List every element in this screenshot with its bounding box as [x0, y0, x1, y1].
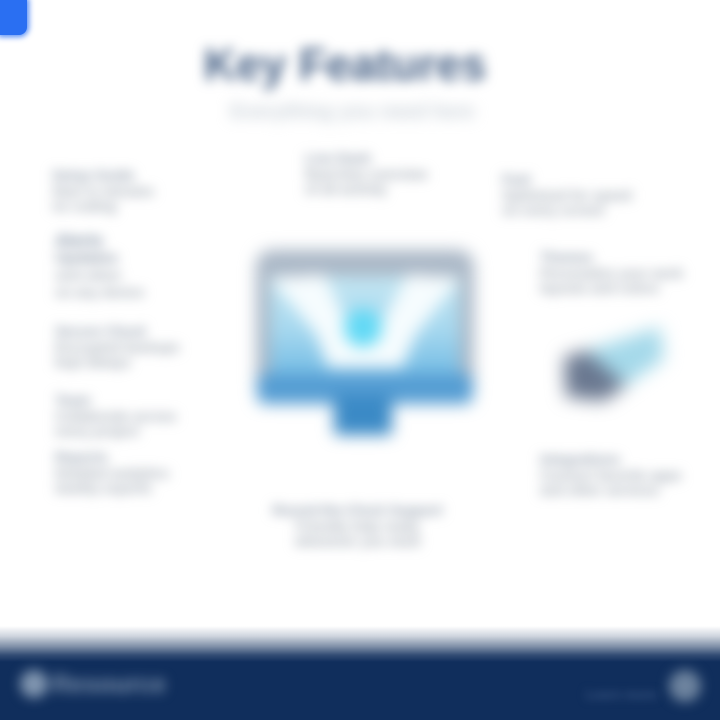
- feature: bottom center: whenever you need: [295, 534, 420, 549]
- feature: right 3: Integrations: [540, 451, 620, 467]
- feature: left 2: Alerts: [55, 231, 103, 250]
- footer icon: [669, 670, 701, 702]
- feature: bottom center: Round-the-Clock Support: [272, 502, 443, 518]
- feature: bottom center: Friendly help ready: [296, 519, 419, 534]
- monitor frame: [256, 250, 474, 400]
- feature: right 2: Themes: [540, 249, 593, 265]
- feature: right 2: [536, 246, 686, 300]
- monitor bottom bar: [257, 374, 473, 404]
- feature: left 1: Start in minutes: [52, 184, 154, 199]
- feature: left 4: Collaborate across: [55, 409, 177, 424]
- feature: left 4: [52, 390, 178, 443]
- feature: left 2: sent when: [55, 268, 121, 283]
- feature: left 5: weekly exports: [55, 481, 152, 496]
- feature: left 4: Team: [55, 392, 91, 408]
- feature: left 5: [50, 446, 171, 500]
- monitor stand: [334, 395, 392, 435]
- footer band: [0, 620, 720, 720]
- feature: left 3: Encrypted backups: [55, 340, 180, 355]
- feature: left 2: [50, 228, 146, 304]
- footer logo: [13, 663, 170, 705]
- feature: left 4: every project: [55, 424, 139, 439]
- footer logo: Resource: [52, 670, 166, 698]
- monitor screen: [270, 276, 460, 384]
- footer caption: Learn more: [586, 687, 657, 702]
- feature: left 1: Setup Guide: [52, 167, 134, 183]
- feature: right 1: Optimized for speed: [502, 188, 632, 203]
- feature: left 1: no coding: [52, 199, 116, 214]
- feature: right 2: Personalize your work: [540, 266, 683, 281]
- feature: right 2: layouts and colors: [540, 281, 659, 296]
- feature: right 1: on every screen: [502, 203, 605, 218]
- feature: bottom center: [268, 500, 446, 552]
- subtitle: Everything you need here: [230, 101, 475, 123]
- feature: right 1: Fast: [502, 171, 531, 187]
- feature: top center: Live Dash: [305, 150, 371, 166]
- feature: right 3: and other services: [540, 483, 659, 498]
- feature: left 1: [48, 165, 156, 218]
- center dot: [344, 309, 382, 347]
- feature: right 3: [536, 449, 684, 500]
- corner accent: [0, 0, 27, 35]
- feature: left 2: on any device: [55, 285, 144, 300]
- icon: tablet device: [551, 320, 674, 414]
- feature: right 1: [498, 170, 636, 221]
- feature: left 3: [51, 321, 182, 374]
- feature: top center: [301, 148, 430, 200]
- feature: right 3: Connect favorite apps: [540, 468, 682, 483]
- light wings: [270, 274, 460, 368]
- feature: left 5: Reports: [55, 449, 108, 465]
- device screen: [586, 327, 664, 385]
- device base: [564, 343, 632, 401]
- icon: monitor: [244, 240, 486, 448]
- feature: top center: of all activity: [305, 182, 387, 197]
- title: Key Features: [204, 39, 486, 90]
- feature: left 3: Secure Cloud: [55, 323, 145, 339]
- feature: left 3: kept always: [55, 355, 131, 370]
- feature: left 5: Detailed analytics: [55, 466, 169, 481]
- feature: left 2: Updates: [55, 250, 118, 267]
- feature: top center: Real-time overview: [305, 167, 427, 182]
